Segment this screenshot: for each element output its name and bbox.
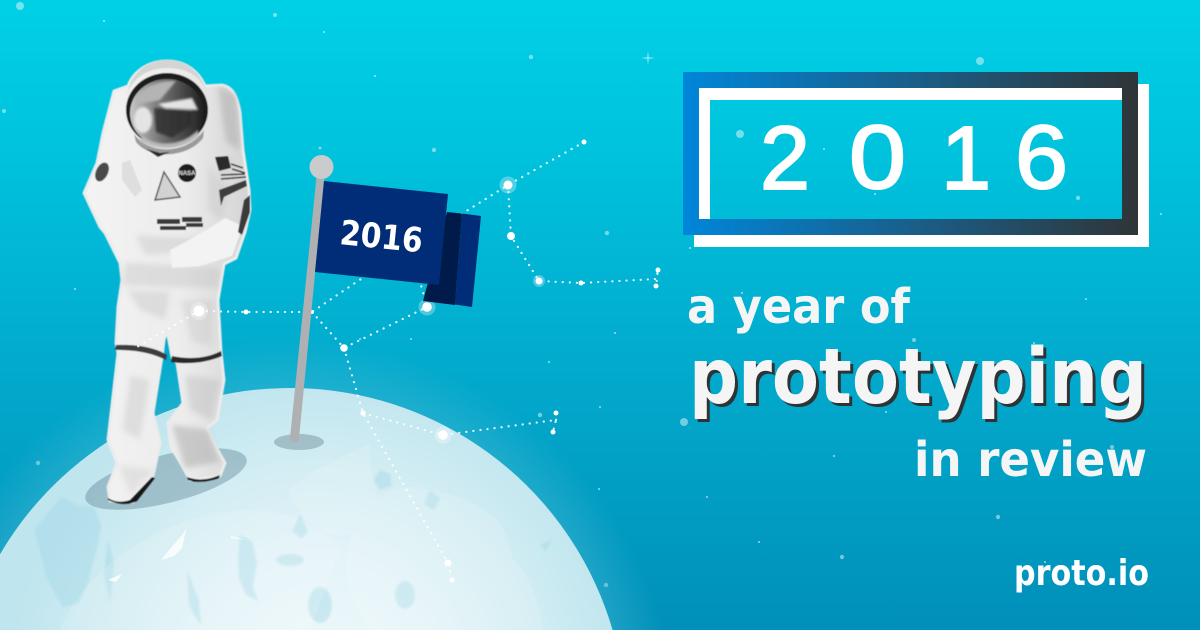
visor <box>130 79 204 147</box>
white offset frame <box>694 84 1149 247</box>
year digits: 1 <box>941 109 991 209</box>
year digits <box>760 108 1068 209</box>
flag tail <box>455 214 481 307</box>
moon glow <box>0 331 663 630</box>
year digits: 2 <box>760 109 810 209</box>
helmet hood shading <box>127 60 207 95</box>
flag back fold <box>423 212 462 305</box>
suit shading <box>118 86 240 495</box>
line: prototyping shadow and fill: prototyping <box>689 333 1147 422</box>
suit silhouette <box>84 61 250 502</box>
arm across torso <box>170 218 243 268</box>
year digits: 6 <box>1015 108 1068 208</box>
NASA patch <box>178 164 196 182</box>
chest name tags <box>157 217 203 230</box>
constellation lines <box>137 142 658 580</box>
logo: proto.io <box>1014 553 1149 594</box>
flag shadow <box>274 434 324 450</box>
astronaut <box>84 60 250 504</box>
moon surface patches <box>35 434 552 630</box>
shuttle triangle patch <box>155 172 180 200</box>
dark right arm edge <box>238 195 250 235</box>
line: in review: in review <box>914 432 1147 488</box>
NASA patch: NASA <box>178 171 196 177</box>
foot shadow <box>85 448 247 510</box>
collar ring <box>134 130 204 154</box>
leg straps <box>115 345 167 360</box>
flag pole ball <box>310 155 334 179</box>
constellation stars <box>190 140 660 582</box>
headline <box>687 279 1150 488</box>
neck clasp <box>146 149 170 157</box>
flag label: 2016 <box>338 213 425 261</box>
left shoulder patch <box>92 160 112 184</box>
US flag patch <box>215 156 246 182</box>
year frame <box>683 72 1149 247</box>
helmet rim <box>126 73 208 147</box>
flag pole <box>290 172 325 442</box>
year digits: 0 <box>849 108 906 208</box>
moon <box>0 388 613 630</box>
flag front <box>315 181 448 285</box>
visor reflections <box>134 81 199 148</box>
arm band <box>219 180 247 206</box>
gradient frame <box>683 72 1138 235</box>
shoe soles <box>108 477 155 504</box>
thumb hand <box>122 160 142 197</box>
flag <box>290 155 481 442</box>
line: prototyping shadow and fill: prototyping <box>692 336 1150 425</box>
line: a year of: a year of <box>687 279 911 335</box>
